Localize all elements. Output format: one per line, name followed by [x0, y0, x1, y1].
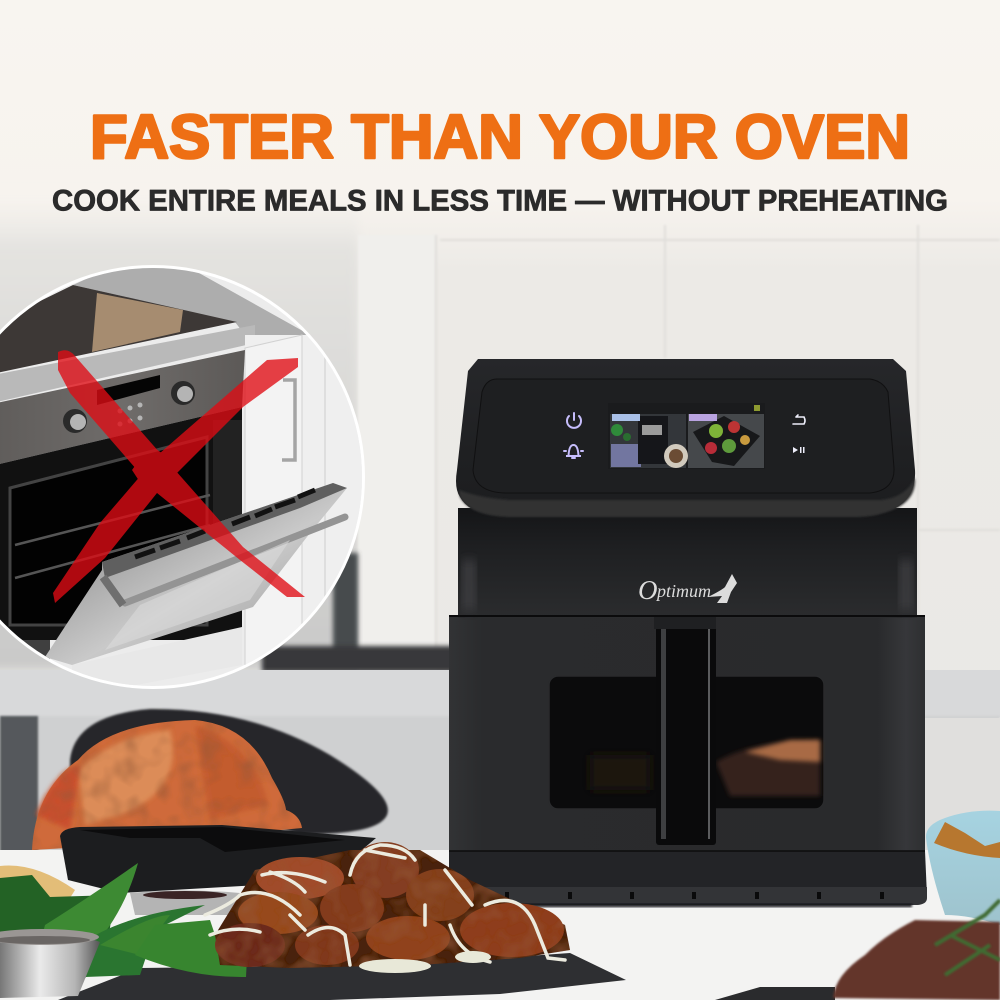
oven controls — [97, 375, 160, 405]
sauce cup back — [130, 890, 240, 915]
fryer lower drawer — [449, 615, 925, 852]
window — [549, 676, 824, 809]
roast chicken — [32, 720, 302, 850]
pastry — [0, 866, 75, 930]
touch screen — [608, 403, 765, 469]
right foreground meat — [833, 900, 1000, 1000]
oven photo circle — [0, 260, 370, 690]
handle — [654, 617, 716, 845]
drawer seam — [449, 615, 925, 617]
Optimum logo: O — [638, 575, 658, 605]
cabinet — [245, 335, 255, 346]
slate board — [58, 953, 626, 1000]
Optimum logo — [638, 574, 737, 605]
open oven door — [45, 483, 347, 665]
mayo drizzle — [205, 845, 565, 965]
fryer top housing — [456, 359, 915, 517]
touch icons — [564, 413, 805, 458]
air fryer — [449, 359, 927, 907]
hob — [0, 285, 237, 372]
oven scene — [0, 274, 302, 686]
control panel — [0, 350, 245, 464]
worktop — [73, 268, 310, 335]
black roasting pan — [60, 825, 376, 893]
fryer mid body — [458, 508, 917, 618]
background black platter — [70, 709, 388, 834]
greens — [0, 863, 248, 978]
subtitle: COOK ENTIRE MEALS IN LESS TIME — WITHOUT PREHEATING — [52, 184, 948, 218]
steel sauce cup — [0, 929, 100, 998]
lower drawer — [184, 627, 242, 640]
bowl right — [926, 811, 1000, 925]
red cross — [53, 350, 305, 603]
title: FASTER THAN YOUR OVEN — [90, 103, 910, 172]
control panel — [473, 379, 894, 493]
chicken wings — [205, 842, 570, 973]
fryer base — [449, 851, 927, 905]
Optimum logo: ptimum — [655, 581, 711, 601]
oven cavity — [0, 407, 242, 640]
